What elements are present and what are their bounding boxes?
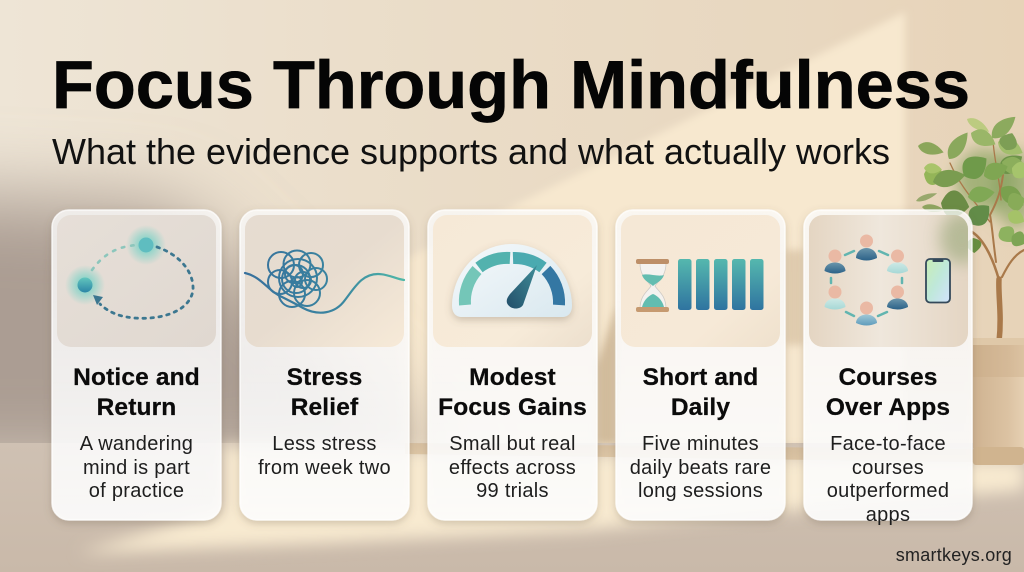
card 5: courses over apps: outperformed — [827, 480, 949, 502]
source credit: smartkeys.org — [896, 545, 1012, 565]
card 4: short and daily — [616, 210, 785, 520]
card 2: stress relief: Relief — [291, 394, 359, 421]
body text: Five minutes — [642, 433, 759, 455]
plant stems — [950, 140, 1024, 342]
card 3: modest focus gains: 99 trials — [476, 480, 549, 502]
five daily session bars — [678, 259, 764, 310]
card 4: short and daily: long sessions — [638, 480, 763, 502]
subtitle: What the evidence supports and what actually works — [52, 131, 890, 172]
card 5: courses over apps — [804, 210, 984, 526]
card 3: modest focus gains: effects across — [449, 457, 576, 479]
heading: Courses — [838, 364, 938, 391]
plant foliage backing — [955, 148, 1024, 230]
card 2: stress relief — [240, 210, 409, 520]
plant pot — [973, 338, 1024, 465]
title: Focus Through Mindfulness — [52, 47, 970, 123]
card 1: notice and return: of practice — [89, 480, 184, 502]
body text: A wandering — [80, 433, 193, 455]
icon: phone — [926, 259, 950, 302]
icon: tangled line unwinding — [245, 250, 404, 313]
card 3: modest focus gains — [428, 210, 597, 520]
icon: wandering attention loop — [65, 225, 193, 318]
card 1: notice and return: mind is part — [83, 457, 190, 479]
icon: hourglass — [636, 259, 669, 312]
card 4: short and daily: daily beats rare — [630, 457, 771, 479]
heading: Modest — [469, 364, 556, 391]
card 1: notice and return — [52, 210, 221, 520]
body text: Less stress — [272, 433, 377, 455]
plant foliage — [915, 111, 1024, 254]
icon: gauge with needle — [452, 244, 572, 317]
heading: Stress — [287, 364, 362, 391]
heading: Notice and — [73, 364, 200, 391]
icon: circle of people — [824, 234, 908, 326]
card 2: stress relief: from week two — [258, 457, 391, 479]
body text: Small but real — [449, 433, 576, 455]
card 3: modest focus gains: Focus Gains — [438, 394, 587, 421]
potted plant — [915, 111, 1024, 465]
card 5: courses over apps: Over Apps — [826, 394, 950, 421]
heading: Short and — [643, 364, 758, 391]
card 5: courses over apps: courses — [852, 457, 924, 479]
card 5: courses over apps: apps — [866, 504, 910, 526]
card 4: short and daily: Daily — [671, 394, 730, 421]
body text: Face-to-face — [830, 433, 946, 455]
card 1: notice and return: Return — [97, 394, 176, 421]
